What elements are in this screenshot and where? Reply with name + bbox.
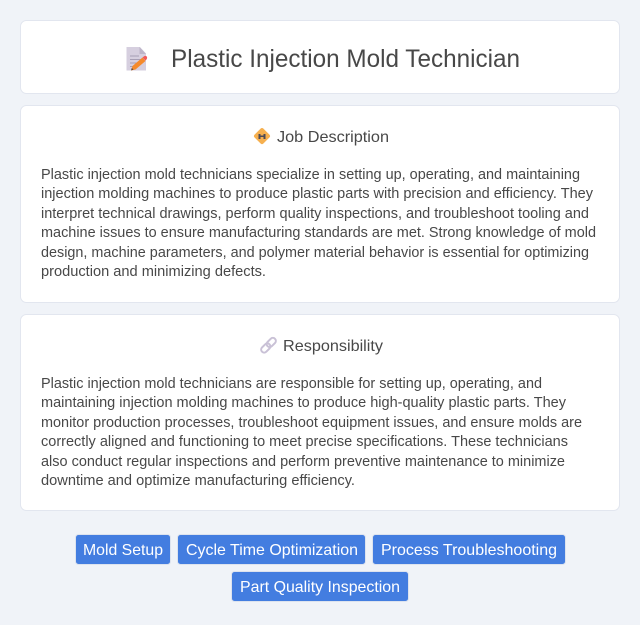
tag: part quality inspection: Part Quality Inspection	[240, 579, 400, 596]
text block: job description: machine issues to ensure manufacturing standards are met. Strong knowledge of mold	[41, 225, 596, 241]
panel: title card	[20, 20, 620, 94]
icon: chain link	[260, 337, 277, 354]
icon: diamond sign	[253, 127, 271, 145]
tag: process troubleshooting: Process Troubleshooting	[381, 542, 557, 559]
tag: part quality inspection	[232, 572, 408, 602]
text block: responsibility: downtime and optimize manufacturing efficiency.	[41, 473, 355, 489]
tag: mold setup	[76, 534, 170, 564]
tag: cycle time optimization	[178, 534, 366, 564]
text block: responsibility: correctly aligned and functioning to meet precise specifications. These technicians	[41, 434, 568, 450]
heading: job description: Job Description	[277, 129, 389, 146]
tag: cycle time optimization: Cycle Time Optimization	[186, 542, 358, 559]
tag: process troubleshooting	[372, 534, 566, 564]
text block: responsibility: monitor production processes, troubleshoot equipment issues, and ensure molds are	[41, 415, 582, 431]
text block: job description: interpret technical drawings, perform quality inspections, and troubleshoot tooling and	[41, 206, 589, 222]
title: Plastic Injection Mold Technician	[171, 45, 520, 73]
text block: job description: injection molding machines to produce plastic parts with precision and efficiency. They	[41, 186, 594, 202]
text block: job description: Plastic injection mold technicians specialize in setting up, operating, and maintaining	[41, 167, 580, 183]
text block: responsibility: also conduct regular inspections and perform preventive maintenance to minimize	[41, 454, 565, 470]
text block: responsibility: maintaining injection molding machines to produce high-quality plastic parts. They	[41, 395, 567, 411]
heading: responsibility: Responsibility	[283, 338, 383, 355]
text block: job description: production and minimizing defects.	[41, 264, 266, 280]
tag: mold setup: Mold Setup	[83, 542, 163, 559]
text block: responsibility: Plastic injection mold technicians are responsible for setting up, operating, and	[41, 376, 542, 392]
icon: document with pencil	[126, 47, 147, 70]
text block: job description	[41, 167, 596, 280]
text block: job description: design, machine parameters, and polymer material behavior is essential for optimizing	[41, 245, 589, 261]
panel: job description	[20, 106, 620, 302]
panel: responsibility	[20, 314, 620, 510]
text block: responsibility	[41, 376, 582, 489]
